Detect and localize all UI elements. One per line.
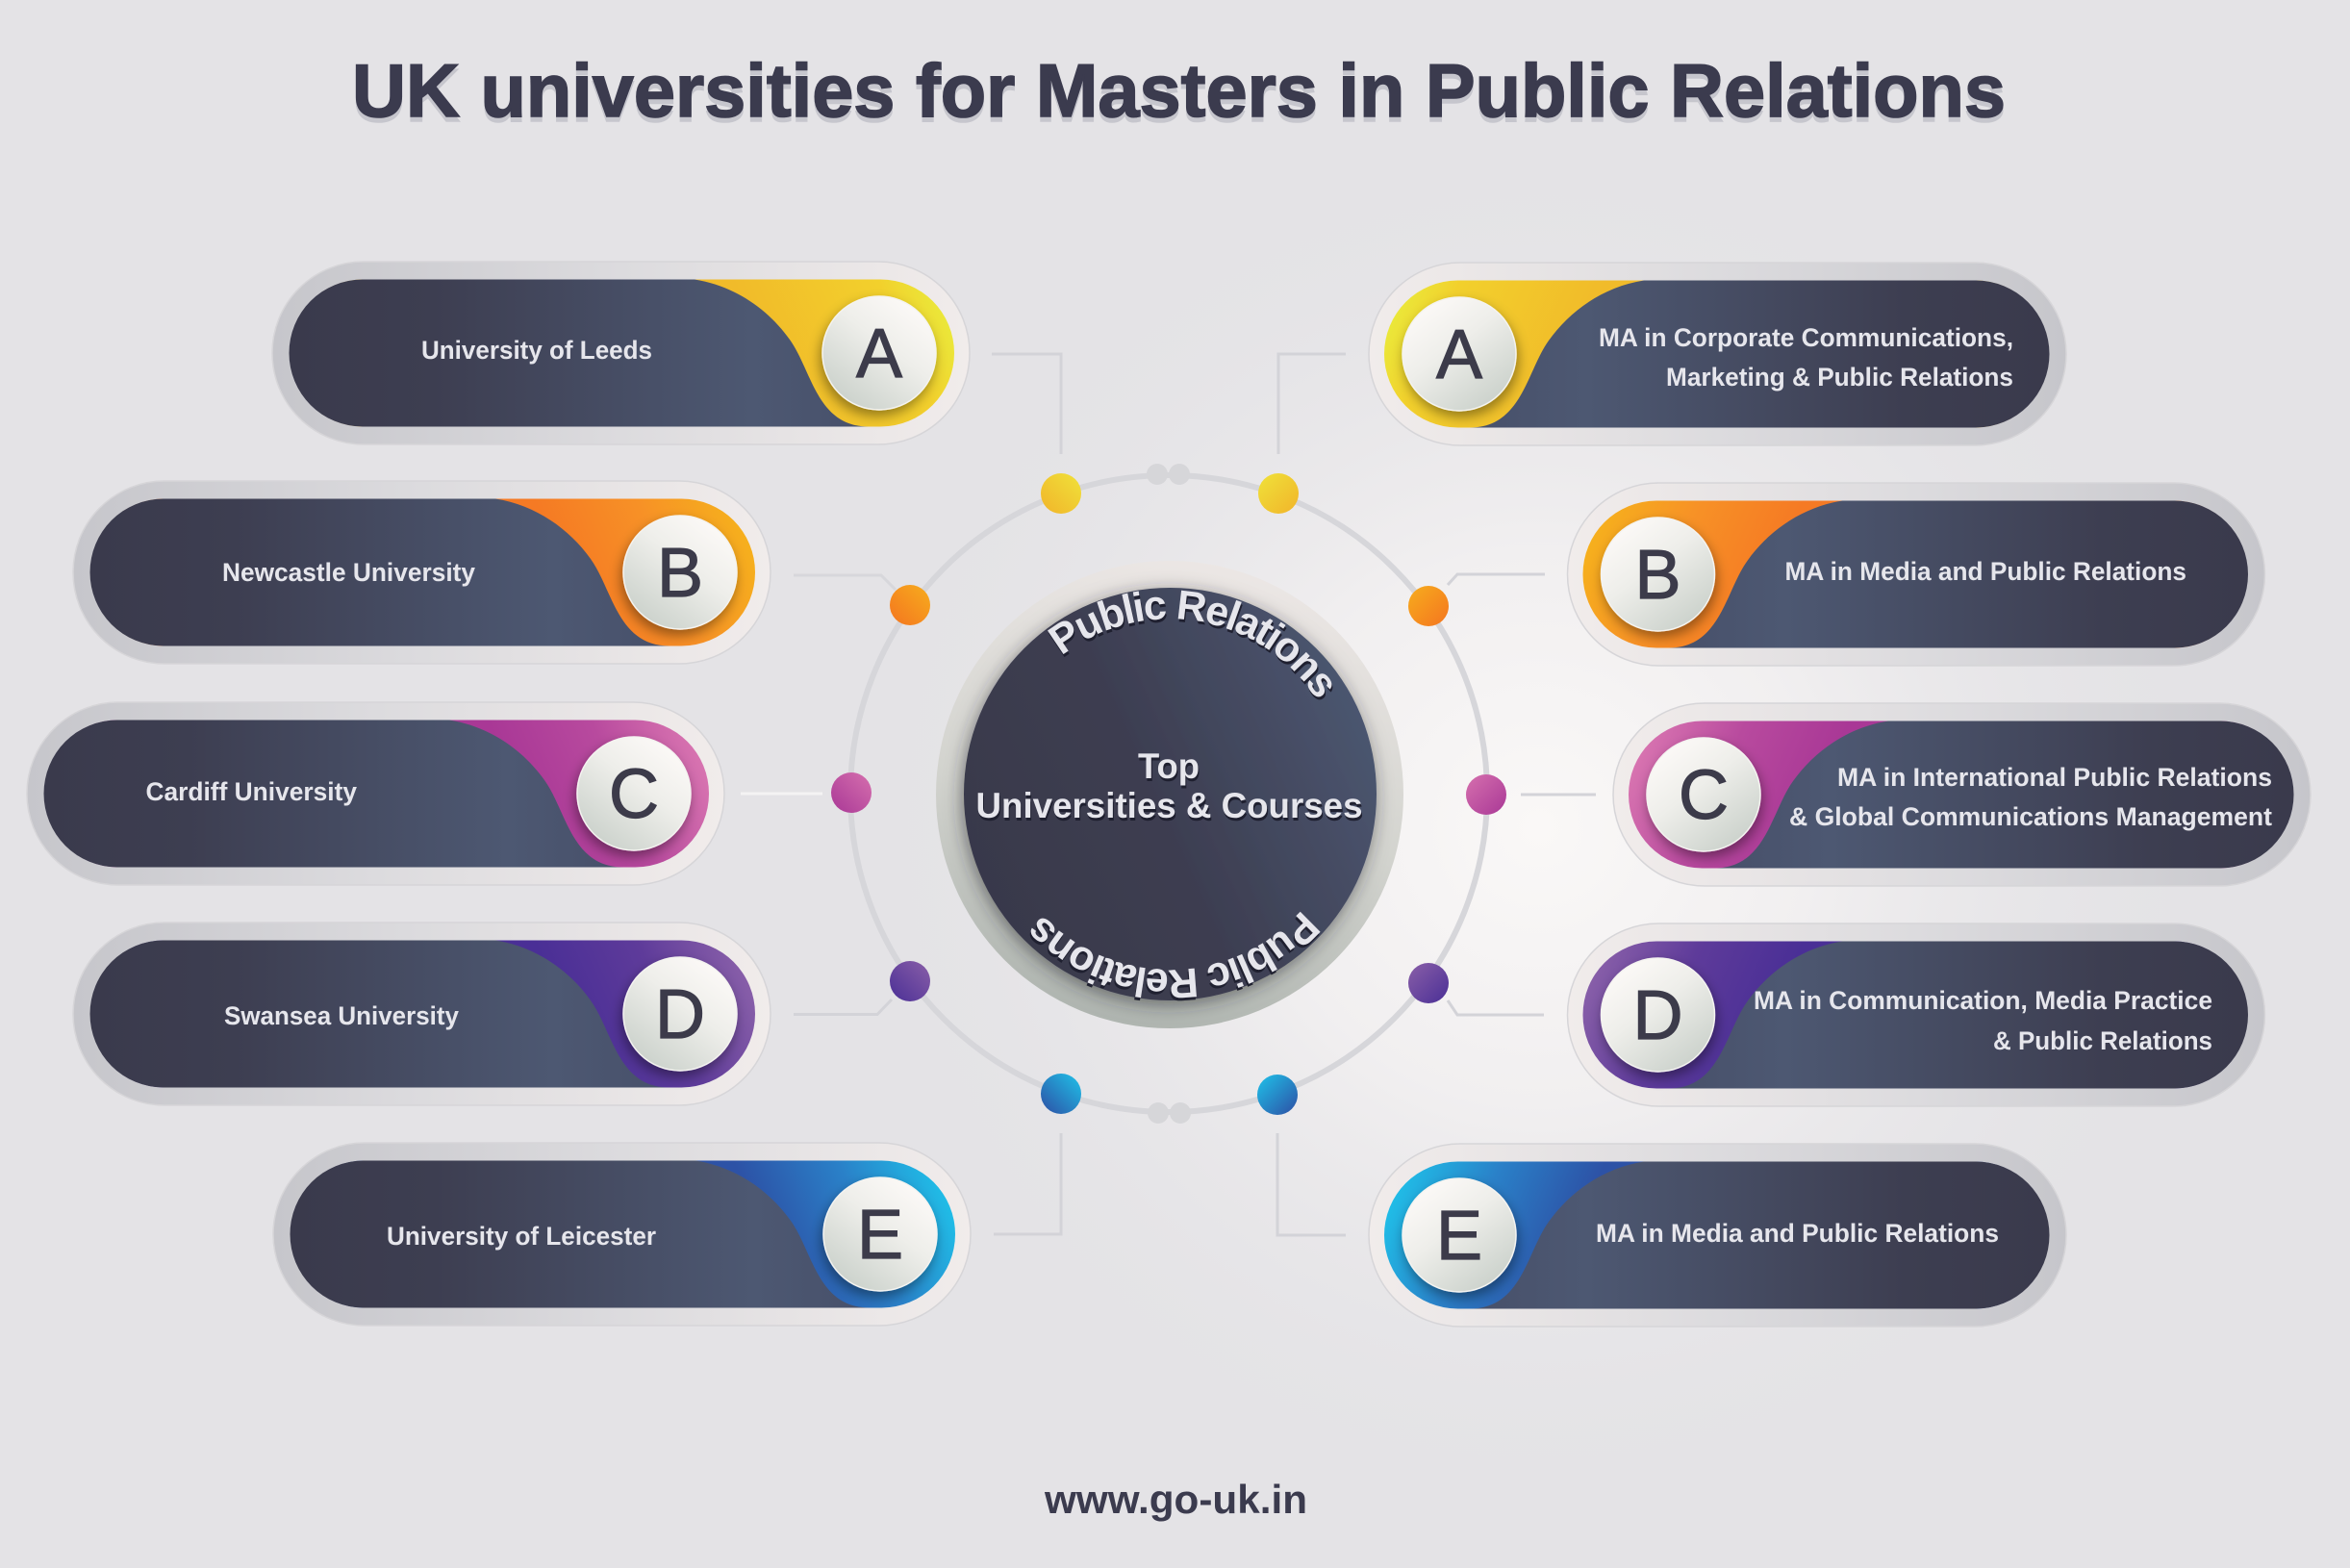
badge letter A: A	[1436, 316, 1482, 393]
central ring	[850, 464, 1487, 1124]
panel: university E	[273, 1143, 971, 1326]
panel: university D	[73, 923, 771, 1105]
panel: course E	[1369, 1144, 2066, 1327]
badge letter C: C	[609, 756, 659, 833]
label: Swansea University: Swansea University	[224, 1001, 459, 1030]
panel: course A	[1369, 263, 2066, 445]
curved text top: Public Relations	[1048, 591, 1333, 700]
label: University of Leicester: University of Leicester	[387, 1222, 656, 1251]
ring nodes	[831, 473, 1506, 1115]
label: MA in International Public Relations: & Global Communications Management	[1789, 802, 2272, 831]
label: MA in Corporate Communications: MA in Corporate Communications,	[1599, 323, 2013, 352]
badge letter B: B	[1634, 537, 1681, 614]
panel: course D	[1568, 923, 2264, 1106]
label: MA in Communication, Media Practice: & Public Relations	[1993, 1026, 2212, 1055]
label: MA in Media and Public Relations: MA in Media and Public Relations	[1596, 1219, 1999, 1248]
label: MA in Media and Public Relations: MA in Media and Public Relations	[1785, 557, 2186, 586]
badge letter A: A	[856, 316, 902, 392]
label: MA in Corporate Communications	[1599, 323, 2013, 392]
badge letter C: C	[1679, 757, 1729, 834]
connector lines	[741, 354, 1596, 1235]
panel: university A	[272, 262, 970, 444]
hub heading: Universities & Courses	[975, 786, 1362, 825]
label: Cardiff University: Cardiff University	[146, 777, 357, 806]
label: MA in Communication, Media Practice: MA in Communication, Media Practice	[1754, 986, 2212, 1015]
panel: course B	[1568, 483, 2264, 666]
panel: course C	[1613, 703, 2311, 886]
label: MA in Communication, Media Practice	[1754, 986, 2212, 1055]
hub heading	[975, 746, 1362, 825]
label: University of Leeds: University of Leeds	[421, 336, 652, 365]
label: Newcastle University: Newcastle University	[222, 558, 475, 587]
label: MA in International Public Relations	[1789, 763, 2272, 831]
panel: university B	[73, 481, 771, 664]
title: UK universities for Masters in Public Relations	[352, 48, 2006, 133]
footer url: www.go-uk.in	[1044, 1477, 1307, 1522]
badge letter D: D	[655, 976, 705, 1053]
curved text bottom: Public Relations	[1029, 912, 1320, 1000]
panel: university C	[27, 702, 724, 885]
central hub	[936, 573, 1403, 1028]
label: MA in Corporate Communications: Marketing & Public Relations	[1666, 363, 2013, 392]
badge letter D: D	[1633, 977, 1683, 1054]
hub heading: Top	[1138, 746, 1200, 786]
label: MA in International Public Relations: MA in International Public Relations	[1837, 763, 2272, 792]
badge letter E: E	[1436, 1198, 1482, 1275]
badge letter B: B	[657, 535, 703, 612]
badge letter E: E	[857, 1197, 903, 1274]
